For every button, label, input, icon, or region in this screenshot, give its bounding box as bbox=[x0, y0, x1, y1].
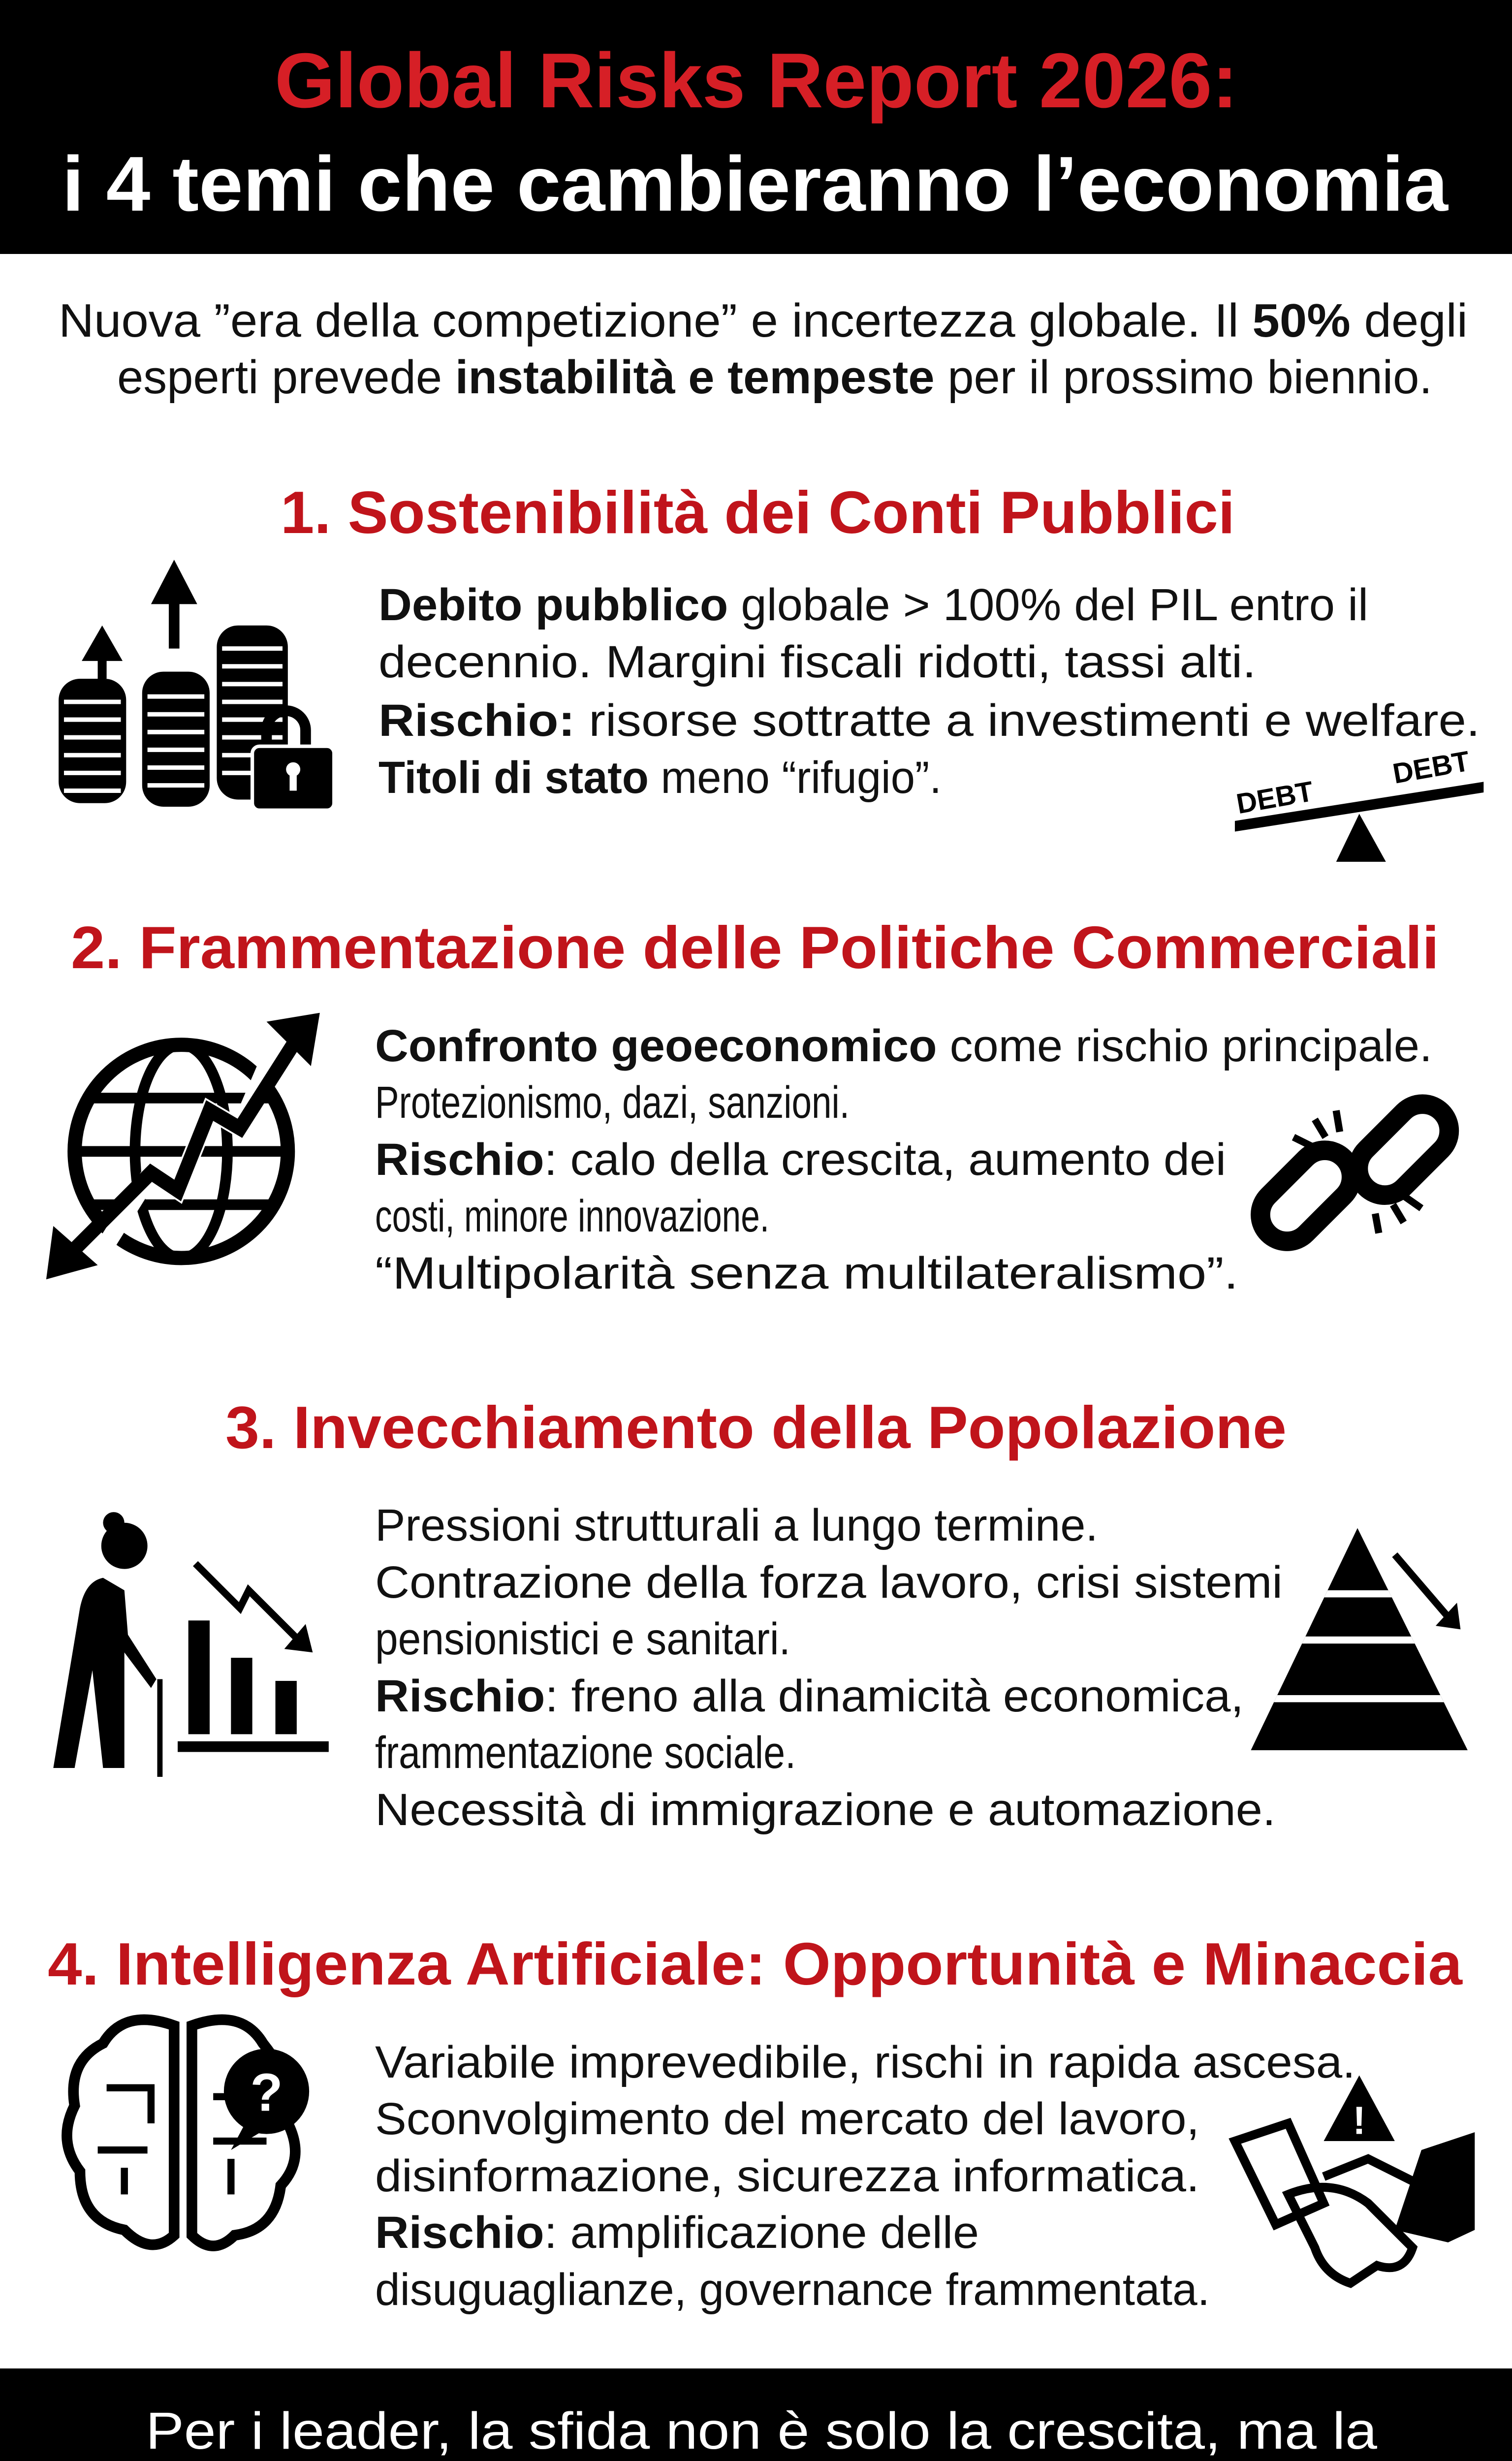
icon: cracked globe with arrow bbox=[46, 1013, 320, 1279]
body 3: Contrazione della forza lavoro, crisi sistemi bbox=[375, 1557, 1283, 1608]
icon: population pyramid with down arrow bbox=[1244, 1528, 1475, 1750]
icon: debt seesaw bbox=[1234, 745, 1483, 862]
body 2: Confronto geoeconomico come rischio principale. bbox=[375, 1021, 1432, 1071]
title line 1: Global Risks Report 2026: bbox=[275, 37, 1238, 124]
body 2: Protezionismo, dazi, sanzioni. bbox=[375, 1077, 850, 1128]
heading 3: 3. Invecchiamento della Popolazione bbox=[225, 1394, 1287, 1461]
body 1: Rischio: risorse sottratte a investimenti e welfare. bbox=[378, 695, 1480, 746]
icon: brain with question mark bbox=[67, 2019, 309, 2246]
icon: handshake with warning: ! bbox=[1353, 2099, 1366, 2143]
body 4: disuguaglianze, governance frammentata. bbox=[375, 2265, 1210, 2315]
body 3: Necessità di immigrazione e automazione. bbox=[375, 1785, 1276, 1835]
body 3: Rischio: freno alla dinamicità economica, bbox=[375, 1671, 1244, 1721]
heading 2: 2. Frammentazione delle Politiche Commerciali bbox=[71, 914, 1439, 981]
body 4 bbox=[375, 2037, 1355, 2315]
icon: broken chain bbox=[1249, 1093, 1460, 1252]
title line 2: i 4 temi che cambieranno l’economia bbox=[62, 141, 1449, 227]
body 4: disinformazione, sicurezza informatica. bbox=[375, 2151, 1199, 2201]
icon: handshake with warning bbox=[1235, 2075, 1475, 2283]
body 4: Rischio: amplificazione delle bbox=[375, 2208, 979, 2258]
body 4: Sconvolgimento del mercato del lavoro, bbox=[375, 2094, 1199, 2144]
body 3: Pressioni strutturali a lungo termine. bbox=[375, 1500, 1098, 1550]
heading 1: 1. Sostenibilità dei Conti Pubblici bbox=[281, 479, 1235, 546]
body 1: decennio. Margini fiscali ridotti, tassi alti. bbox=[378, 637, 1256, 687]
intro text: Nuova ”era della competizione” e incertezza globale. Il 50% degli bbox=[59, 294, 1468, 347]
body 2: costi, minore innovazione. bbox=[375, 1191, 769, 1241]
intro text: esperti prevede instabilità e tempeste per il prossimo biennio. bbox=[117, 351, 1432, 404]
body 2: Rischio: calo della crescita, aumento dei bbox=[375, 1135, 1226, 1185]
icon: debt seesaw: DEBT bbox=[1390, 745, 1472, 790]
body 3: pensionistici e sanitari. bbox=[375, 1614, 790, 1664]
intro text bbox=[59, 294, 1468, 404]
icon: brain with question mark: ? bbox=[250, 2063, 283, 2122]
body 2 bbox=[375, 1021, 1432, 1298]
footer conclusion: Per i leader, la sfida non è solo la crescita, ma la bbox=[146, 2402, 1377, 2460]
body 3: frammentazione sociale. bbox=[375, 1728, 796, 1778]
body 3 bbox=[375, 1500, 1283, 1835]
icon: debt seesaw: DEBT bbox=[1234, 776, 1316, 820]
body 1 bbox=[378, 580, 1480, 803]
icon: coins with arrows and lock bbox=[59, 560, 334, 810]
icon: elderly person with declining chart bbox=[53, 1512, 329, 1777]
header: black title band bbox=[0, 0, 1512, 254]
body 1: Debito pubblico globale > 100% del PIL entro il bbox=[378, 580, 1368, 630]
body 1: Titoli di stato meno “rifugio”. bbox=[378, 753, 942, 803]
body 4: Variabile imprevedibile, rischi in rapida ascesa. bbox=[375, 2037, 1355, 2087]
heading 4: 4. Intelligenza Artificiale: Opportunità e Minaccia bbox=[48, 1930, 1463, 1997]
footer: black band with conclusion and URL bbox=[0, 2368, 1512, 2461]
body 2: “Multipolarità senza multilateralismo”. bbox=[375, 1248, 1238, 1298]
